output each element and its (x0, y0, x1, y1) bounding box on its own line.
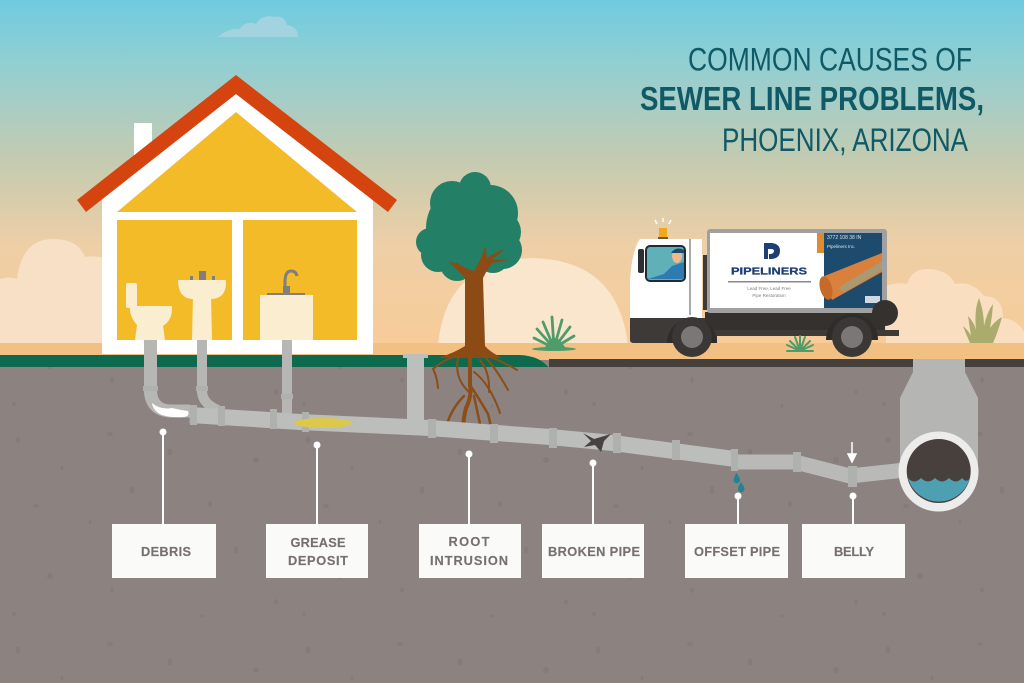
truck window (638, 246, 685, 281)
small agave under truck (787, 336, 813, 351)
tree canopy (416, 172, 522, 281)
callout: grease deposit: GREASE (290, 535, 346, 550)
callout: grease deposit: DEPOSIT (288, 553, 348, 568)
sewer pipe system (143, 340, 905, 492)
callout: broken pipe: BROKEN PIPE (548, 544, 640, 559)
green lawn band (0, 355, 549, 368)
leak drops (734, 473, 744, 492)
manhole (898, 359, 978, 512)
left background hills (0, 239, 104, 345)
debris clog (152, 403, 188, 417)
offset section (738, 462, 905, 476)
left agave plant (532, 317, 576, 351)
title: COMMON CAUSES OF (688, 42, 972, 78)
right desert plant (963, 298, 1002, 343)
manhole ring (898, 432, 978, 512)
icon: copper pipe (822, 253, 882, 300)
callout: offset pipe (685, 492, 788, 578)
toilet drain pipe (150, 340, 190, 411)
icon: pedestal sink (178, 271, 226, 340)
tree roots (433, 354, 517, 436)
sand strip (0, 343, 1024, 360)
center background hill (438, 258, 628, 345)
sink drain pipe (202, 340, 218, 410)
slogan: Lead Free, Lead Free (747, 286, 791, 291)
truck chassis (630, 318, 717, 343)
callout: root intrusion (419, 450, 521, 578)
icon: toilet (126, 283, 172, 340)
callout: broken pipe (542, 460, 644, 578)
grease deposit (294, 418, 352, 428)
left room (117, 220, 232, 340)
house walls (102, 94, 373, 354)
kitchen drain pipe (282, 340, 292, 416)
icon: chimney (134, 123, 152, 163)
callout: belly: BELLY (834, 544, 874, 559)
callout: grease deposit (266, 442, 368, 578)
spare tank (872, 300, 898, 326)
icon: beacon light (655, 218, 671, 240)
truck cab (630, 239, 702, 318)
advertising panel: Pipe Restoration (752, 293, 786, 298)
truck cargo box (707, 229, 887, 313)
roof (77, 75, 397, 212)
callout: offset pipe: OFFSET PIPE (694, 544, 780, 559)
icon: kitchen sink (260, 271, 313, 340)
icon: P logo (764, 243, 780, 259)
delivery truck (630, 218, 899, 357)
sewage water (908, 478, 970, 502)
tree trunk (438, 246, 508, 358)
callout: debris: DEBRIS (141, 544, 191, 559)
callout: belly (802, 492, 905, 578)
dark road band (549, 359, 1024, 368)
advertising panel (710, 233, 824, 308)
right room (243, 220, 357, 340)
logo wordmark: PIPELINERS (731, 266, 807, 278)
sky background (0, 0, 1024, 350)
manhole interior (907, 439, 971, 503)
tree (416, 172, 522, 436)
vent stack (403, 354, 428, 428)
pipe couplings (143, 386, 857, 487)
pipe crack (583, 433, 611, 452)
house (77, 75, 397, 354)
cloud (218, 16, 298, 37)
rear wheel (832, 317, 872, 357)
callout: root intrusion: INTRUSION (430, 553, 508, 568)
right background hills (886, 269, 1024, 345)
underground soil (0, 367, 1024, 683)
blue pipe panel (817, 233, 882, 308)
callout: debris (112, 428, 216, 578)
blue pipe panel: Pipeliners Inc. (827, 244, 855, 249)
callout: root intrusion: ROOT (448, 534, 490, 549)
attic (117, 112, 357, 212)
title (640, 42, 984, 158)
belly arrow (848, 442, 856, 462)
title: PHOENIX, ARIZONA (722, 122, 969, 158)
blue pipe panel: 3772 108 38 IN (827, 235, 862, 241)
front wheel (672, 317, 712, 357)
manhole shaft (900, 359, 978, 480)
main line (190, 415, 735, 459)
